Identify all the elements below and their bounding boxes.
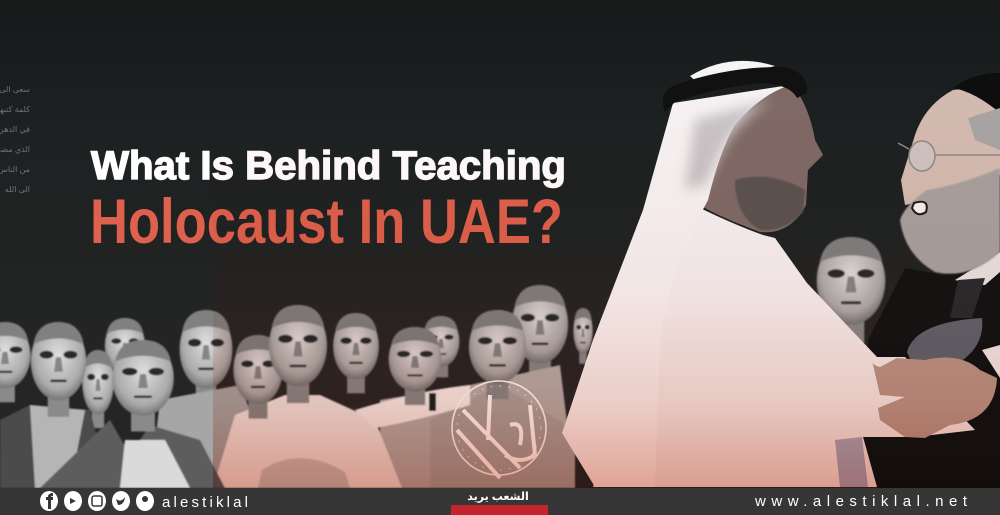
faint calligraphy texture: الى الله <box>5 185 30 194</box>
colour tint over photos <box>213 60 1000 488</box>
footer bar <box>0 488 1000 515</box>
photo: rabbi <box>862 73 1000 488</box>
bodies <box>0 365 575 488</box>
suit <box>862 250 1000 488</box>
title <box>90 144 566 257</box>
beard <box>900 168 1000 274</box>
back row heads <box>82 285 593 428</box>
title line 1: What Is Behind Teaching <box>91 144 566 188</box>
glasses <box>898 141 1000 171</box>
slogan: الشعب يريد <box>467 491 529 503</box>
white robe <box>593 208 975 487</box>
face <box>700 87 823 232</box>
logo emblem <box>452 381 546 478</box>
shirt and tie <box>950 252 1000 378</box>
head <box>901 85 1000 205</box>
faint calligraphy texture: في الدهر <box>0 125 30 134</box>
handle: alestiklal <box>162 494 248 511</box>
headdress top <box>690 61 775 85</box>
website: www.alestiklal.net <box>754 493 968 510</box>
faint calligraphy texture: سعى الى <box>0 85 30 94</box>
headdress veil <box>562 85 790 487</box>
red tab <box>451 505 548 515</box>
kippah in hand <box>907 318 982 370</box>
black agal <box>663 67 807 112</box>
hair <box>968 108 1000 150</box>
photo: Emirati man <box>562 61 997 487</box>
hand <box>872 358 997 438</box>
mouth <box>912 202 927 214</box>
background prisoner behind the embrace <box>817 237 885 343</box>
front row heads <box>0 305 526 431</box>
social icons <box>40 491 154 511</box>
photo: crowd of prisoners <box>0 285 593 488</box>
title line 2: Holocaust In UAE? <box>90 187 563 257</box>
faint calligraphy texture <box>0 85 30 194</box>
hat <box>953 73 1000 113</box>
